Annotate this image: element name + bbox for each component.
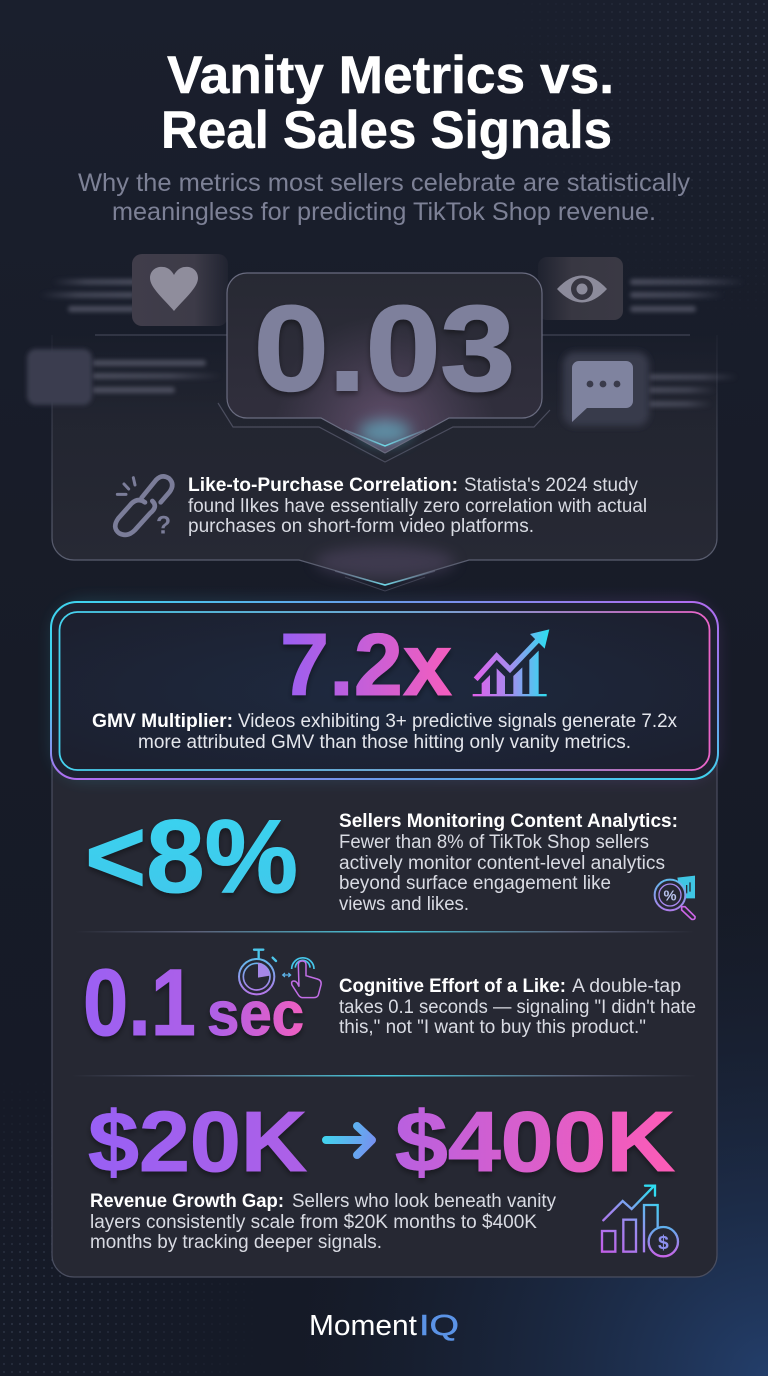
text: revenue growth gap: Sellers who look beneath vanity bbox=[292, 1191, 556, 1212]
text: sellers monitoring content analytics: Sellers Monitoring Content Analytics: bbox=[339, 811, 678, 832]
icon: revenue chart with coin: $ bbox=[658, 1233, 669, 1254]
stat: less than 8 percent: <8% bbox=[85, 799, 298, 915]
text: cognitive effort of a like: takes 0.1 seconds — signaling "I didn't hate bbox=[339, 997, 696, 1018]
text: like-to-purchase correlation: found lIkes have essentially zero correlation with actual bbox=[188, 496, 647, 517]
text: sellers monitoring content analytics bbox=[339, 811, 678, 915]
text: cognitive effort of a like: A double-tap bbox=[572, 976, 681, 997]
streak lines: left middle bbox=[92, 360, 222, 393]
stat: $20K to $400K: $400K bbox=[395, 1095, 675, 1190]
logo: MomentIQ: Moment bbox=[309, 1310, 417, 1342]
text: cognitive effort of a like bbox=[339, 976, 696, 1038]
callout: 0.03 badge bbox=[218, 273, 550, 462]
icon: broken chain: ? bbox=[156, 512, 171, 539]
logo: MomentIQ: IQ bbox=[419, 1310, 459, 1342]
text: sellers monitoring content analytics: Fewer than 8% of TikTok Shop sellers bbox=[339, 832, 649, 853]
title: Real Sales Signals bbox=[161, 101, 612, 160]
panel: like-to-purchase correlation bbox=[27, 254, 745, 585]
text: like-to-purchase correlation: Like-to-Purchase Correlation: bbox=[188, 475, 458, 496]
subtitle: Why the metrics most sellers celebrate are statistically bbox=[78, 169, 691, 197]
text: like-to-purchase correlation: Statista's 2024 study bbox=[464, 475, 638, 496]
title bbox=[161, 46, 614, 160]
text: GMV multiplier bbox=[92, 711, 677, 753]
text: GMV multiplier: GMV Multiplier: bbox=[92, 711, 233, 732]
subtitle: meaningless for predicting TikTok Shop revenue. bbox=[112, 198, 656, 226]
text: cognitive effort of a like: Cognitive Effort of a Like: bbox=[339, 976, 566, 997]
subtitle bbox=[78, 169, 691, 226]
arrow: 20K to 400K bbox=[326, 1126, 372, 1155]
icon: blurred blank tile bbox=[27, 349, 92, 405]
title: Vanity Metrics vs. bbox=[167, 46, 614, 105]
icon: magnifier with percent bbox=[655, 876, 695, 919]
text: sellers monitoring content analytics: actively monitor content-level analytics bbox=[339, 853, 665, 874]
icon: comment bubble bbox=[563, 352, 649, 426]
icon: growth chart bbox=[473, 629, 549, 696]
icon: magnifier with percent: % bbox=[663, 888, 677, 904]
text: sellers monitoring content analytics: beyond surface engagement like bbox=[339, 873, 611, 894]
text: like-to-purchase correlation: purchases on short-form video platforms. bbox=[188, 516, 534, 537]
decorative glow bbox=[58, 606, 712, 774]
icon: broken chain bbox=[115, 476, 172, 539]
icon: stopwatch and tap bbox=[239, 950, 321, 998]
streak lines: right top bbox=[630, 279, 745, 312]
arrow: chevron between panels bbox=[335, 571, 435, 591]
panel: GMV multiplier bbox=[51, 602, 718, 779]
stat: 0.1 sec bbox=[83, 950, 304, 1056]
big number 7.2x: 7.2x bbox=[280, 615, 452, 714]
icon: eye tile bbox=[538, 257, 623, 320]
text: GMV multiplier: Videos exhibiting 3+ predictive signals generate 7.2x bbox=[238, 711, 677, 732]
panel: stacked statistics bbox=[51, 602, 718, 1277]
text: revenue growth gap bbox=[90, 1191, 556, 1253]
divider bbox=[75, 931, 695, 932]
text: revenue growth gap: layers consistently scale from $20K months to $400K bbox=[90, 1212, 537, 1233]
icon: heart tile bbox=[132, 254, 228, 326]
streak lines: left top bbox=[40, 279, 137, 312]
streak lines: right middle bbox=[648, 374, 738, 407]
stat: 0.1 sec: sec bbox=[207, 980, 304, 1049]
stat: 0.1 sec: 0.1 bbox=[83, 950, 196, 1056]
divider bbox=[72, 1075, 697, 1076]
text: like-to-purchase correlation bbox=[188, 475, 647, 537]
stat: $20K to $400K: $20K bbox=[88, 1095, 307, 1190]
stat: $20K to $400K bbox=[88, 1095, 675, 1190]
text: revenue growth gap: Revenue Growth Gap: bbox=[90, 1191, 284, 1212]
text: revenue growth gap: months by tracking deeper signals. bbox=[90, 1232, 382, 1253]
big number 0.03: 0.03 bbox=[254, 280, 515, 416]
text: cognitive effort of a like: this," not "I want to buy this product." bbox=[339, 1017, 646, 1038]
icon: revenue chart with coin bbox=[602, 1186, 678, 1256]
text: sellers monitoring content analytics: views and likes. bbox=[339, 894, 469, 915]
text: GMV multiplier: more attributed GMV than those hitting only vanity metrics. bbox=[138, 732, 631, 753]
logo: MomentIQ bbox=[309, 1310, 459, 1342]
